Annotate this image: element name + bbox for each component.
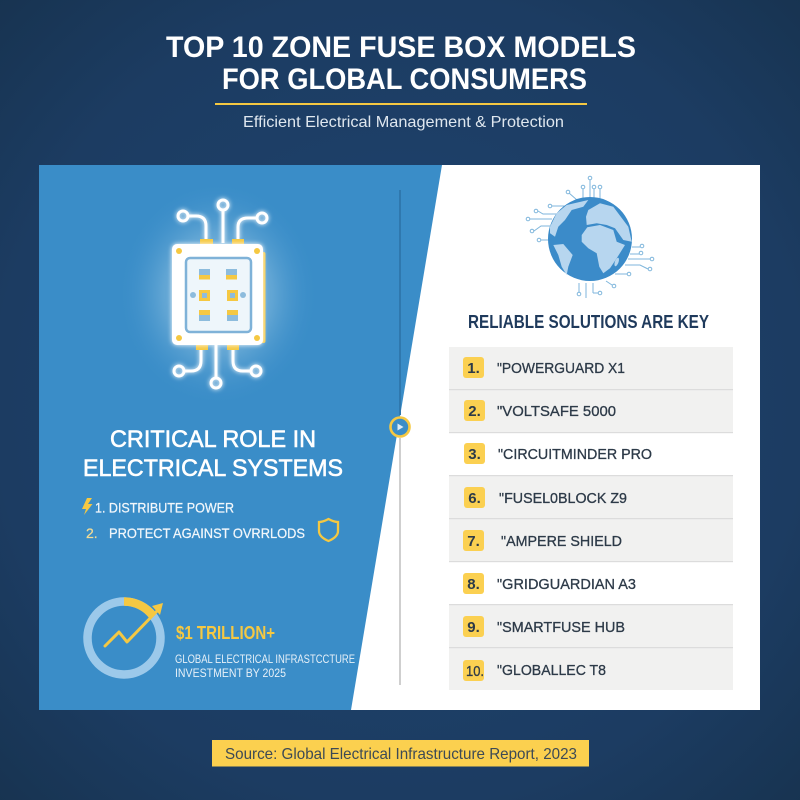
source note: Source: Global Electrical Infrastructure Report, 2023	[225, 746, 577, 763]
row 3	[449, 433, 733, 475]
icon: fuse box	[118, 182, 318, 406]
row 1: 1.	[467, 360, 480, 377]
title: TOP 10 ZONE FUSE BOX MODELS	[166, 31, 636, 64]
row 3: "CIRCUITMINDER PRO	[498, 446, 652, 463]
row 4	[449, 476, 733, 518]
icon: shield	[319, 519, 338, 541]
row 2	[449, 390, 733, 432]
row 1	[449, 347, 733, 389]
source note	[212, 740, 589, 766]
heading: critical role	[83, 426, 343, 482]
continents	[550, 200, 632, 275]
circuit traces	[174, 200, 267, 388]
row 4: "FUSEL0BLOCK Z9	[499, 490, 627, 507]
stat value: $1 TRILLION+	[176, 623, 275, 643]
row 7: 9.	[467, 619, 480, 636]
row 2: 2.	[468, 403, 481, 420]
text: list item 2: 2.	[86, 525, 98, 541]
row 2: "VOLTSAFE 5000	[497, 403, 616, 420]
box body	[172, 244, 263, 345]
corner screws	[176, 248, 260, 341]
row 1: "POWERGUARD X1	[497, 360, 625, 377]
row 6	[449, 562, 733, 604]
stat caption: GLOBAL ELECTRICAL INFRASTCCTURE	[175, 652, 355, 666]
row 3: 3.	[468, 446, 481, 463]
circuit lines	[526, 176, 654, 298]
stat caption: INVESTMENT BY 2025	[175, 666, 286, 680]
row 5	[449, 519, 733, 561]
icon: growth ring and arrow	[88, 602, 163, 674]
title	[166, 31, 636, 96]
icon: lightning bolt	[82, 498, 92, 515]
stat caption	[175, 652, 355, 680]
heading: critical role: CRITICAL ROLE IN	[110, 426, 316, 453]
title underline	[215, 103, 587, 105]
icon: globe with circuits	[526, 176, 654, 298]
row 5: "AMPERE SHIELD	[501, 533, 622, 550]
row 6: "GRIDGUARDIAN A3	[497, 576, 636, 593]
row 7	[449, 605, 733, 647]
row 8: 10.	[466, 663, 484, 680]
row 6: 8.	[467, 576, 480, 593]
row 8	[449, 648, 733, 690]
text: list item 2: PROTECT AGAINST OVRRLODS	[109, 525, 305, 541]
heading: reliable solutions: RELIABLE SOLUTIONS ARE KEY	[468, 312, 709, 332]
text: list item 1: 1. DISTRIBUTE POWER	[95, 500, 234, 516]
subtitle: Efficient Electrical Management & Protection	[243, 114, 564, 131]
row 8: "GLOBALLEC T8	[497, 662, 606, 679]
panel: blue diagonal section	[39, 165, 442, 710]
connector tabs	[196, 239, 244, 350]
title: FOR GLOBAL CONSUMERS	[222, 63, 587, 96]
panel: ranked model list	[449, 347, 733, 690]
row 7: "SMARTFUSE HUB	[497, 619, 625, 636]
icon: play marker	[390, 418, 410, 436]
panel: main card	[39, 165, 760, 710]
row 4: 6.	[468, 490, 481, 507]
vertical divider with marker	[390, 190, 410, 685]
fuses	[190, 269, 246, 321]
row 5: 7.	[467, 533, 480, 550]
heading: critical role: ELECTRICAL SYSTEMS	[83, 455, 343, 482]
